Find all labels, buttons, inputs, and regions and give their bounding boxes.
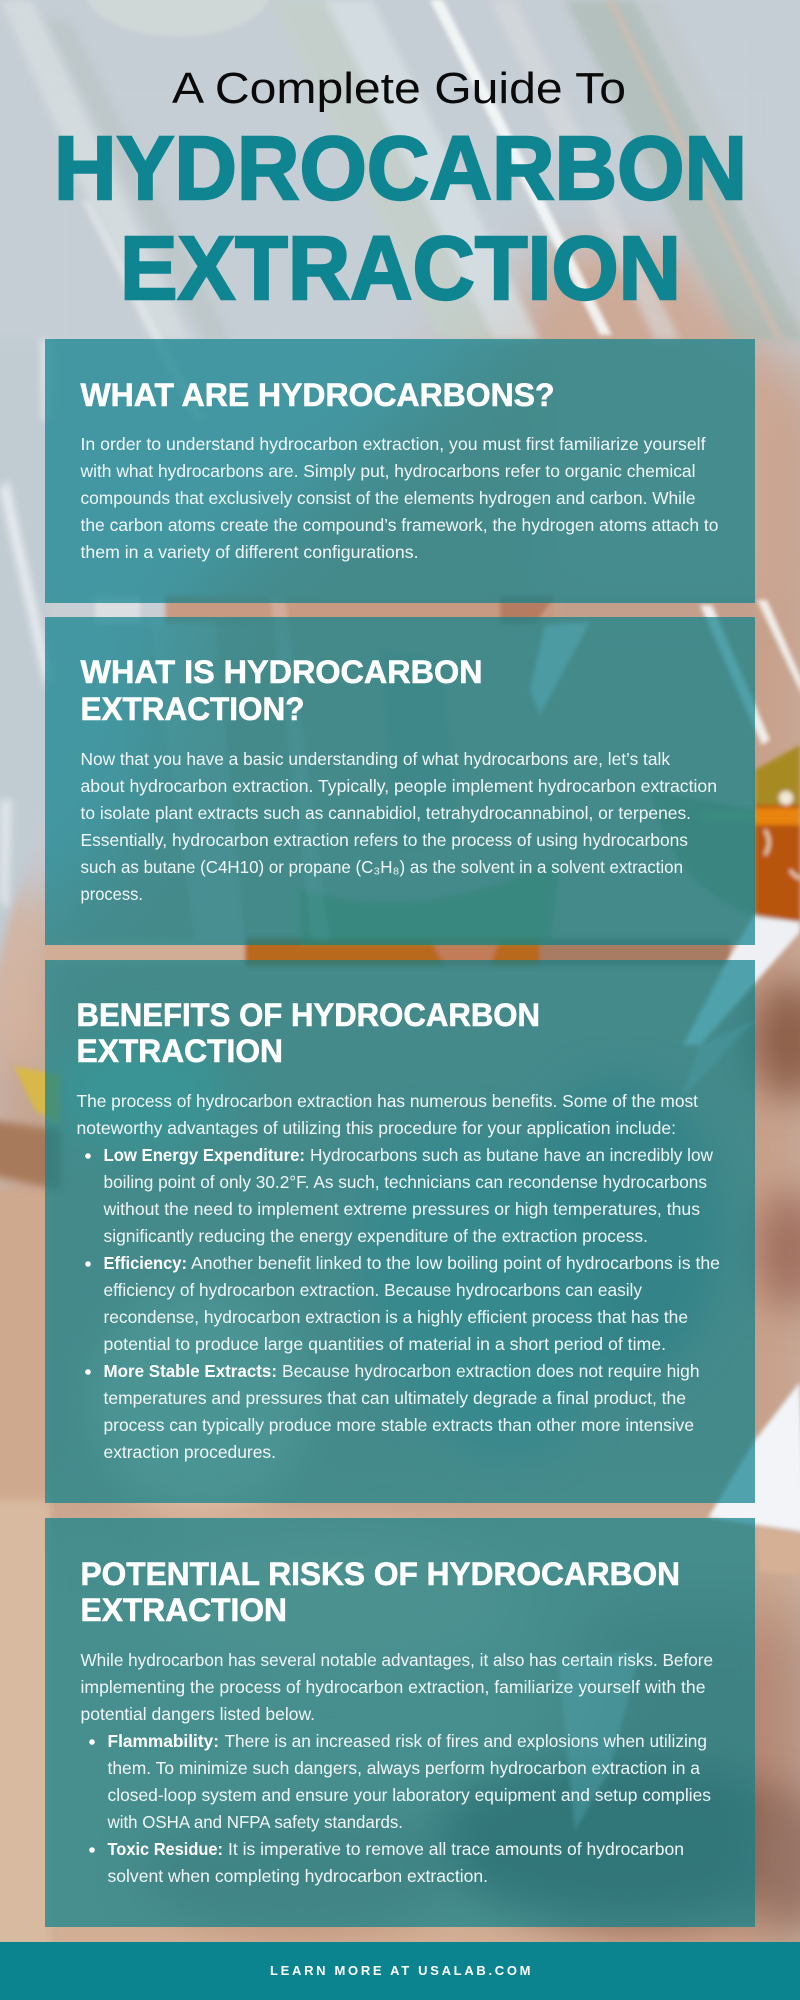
heading: what is hydrocarbon extraction: EXTRACTION? <box>80 691 304 727</box>
title <box>54 64 747 319</box>
text block: extraction explanation: process. <box>80 884 143 904</box>
liquid flask right <box>650 790 800 922</box>
text block: definition: the carbon atoms create the compound’s framework, the hydrogen atoms attach to <box>80 515 719 535</box>
bullet: efficiency: Efficiency: <box>104 1253 187 1273</box>
panel: what is hydrocarbon extraction <box>45 617 755 945</box>
text block: extraction explanation: such as butane (C4H10) or propane (C₃H₈) as the solvent in a solvent extraction <box>80 857 683 877</box>
skin and liquid seen between panels <box>165 596 555 624</box>
bullet: flammability: them. To minimize such dangers, always perform hydrocarbon extraction in a <box>108 1758 700 1778</box>
text block: definition: In order to understand hydrocarbon extraction, you must first familiarize yourself <box>80 434 706 454</box>
text block: definition <box>80 434 719 562</box>
text block: benefits intro: The process of hydrocarbon extraction has numerous benefits. Some of the most <box>76 1091 698 1111</box>
panel 4 box <box>45 1518 755 1927</box>
bullet: toxic residue: It is imperative to remove all trace amounts of hydrocarbon <box>228 1839 684 1859</box>
text block: extraction explanation: about hydrocarbon extraction. Typically, people implement hydrocarbon extraction <box>80 776 717 796</box>
bullet: low energy expenditure: boiling point of only 30.2°F. As such, technicians can recondense hydrocarbons <box>104 1172 707 1192</box>
bullet: efficiency <box>85 1253 720 1354</box>
white cuff lower right <box>708 1382 800 1532</box>
bullet: more stable extracts: More Stable Extracts: <box>104 1361 277 1381</box>
bullet: toxic residue: solvent when completing hydrocarbon extraction. <box>108 1866 488 1886</box>
text block: extraction explanation: Essentially, hydrocarbon extraction refers to the process of using hydrocarbons <box>80 830 688 850</box>
heading: what is hydrocarbon extraction <box>80 654 482 727</box>
bullet: toxic residue <box>89 1839 684 1886</box>
text block: risks intro: implementing the process of hydrocarbon extraction, familiarize yourself with the <box>80 1677 706 1697</box>
text block: definition: them in a variety of different configurations. <box>80 542 418 562</box>
text block: benefits intro <box>76 1091 698 1138</box>
text block: risks intro: While hydrocarbon has several notable advantages, it also has certain risks. Before <box>80 1650 713 1670</box>
heading: what is hydrocarbon extraction: WHAT IS HYDROCARBON <box>80 654 482 690</box>
bullet: flammability <box>89 1731 711 1832</box>
title line: Extraction: EXTRACTION <box>120 219 681 319</box>
bullet: low energy expenditure: without the need to implement extreme pressures or high temperatures, thus <box>103 1199 700 1219</box>
white glass band right <box>683 913 800 1045</box>
bullet: flammability: Flammability: <box>108 1731 219 1751</box>
footer bar <box>0 1942 800 2000</box>
text block: extraction explanation: Now that you have a basic understanding of what hydrocarbons are, let’s talk <box>80 749 670 769</box>
panel: potential risks of hydrocarbon extraction <box>45 1518 755 1927</box>
bullet: efficiency: Another benefit linked to the low boiling point of hydrocarbons is the <box>191 1253 720 1273</box>
panel: what are hydrocarbons <box>45 339 755 603</box>
bullet: more stable extracts: Because hydrocarbon extraction does not require high <box>282 1361 700 1381</box>
heading: potential risks: POTENTIAL RISKS OF HYDROCARBON <box>80 1556 680 1592</box>
bullet: flammability: There is an increased risk of fires and explosions when utilizing <box>224 1731 707 1751</box>
text block: definition: with what hydrocarbons are. Simply put, hydrocarbons refer to organic chemical <box>80 461 695 481</box>
heading: potential risks <box>80 1556 680 1628</box>
text block: extraction explanation: to isolate plant extracts such as cannabidiol, tetrahydrocannabinol, or terpenes. <box>80 803 691 823</box>
bullet: efficiency: efficiency of hydrocarbon extraction. Because hydrocarbons can easily <box>104 1280 642 1300</box>
bullet: low energy expenditure: Hydrocarbons such as butane have an incredibly low <box>310 1145 713 1165</box>
text block: benefits intro: noteworthy advantages of utilizing this procedure for your application include: <box>76 1118 676 1138</box>
panel 1 box <box>45 339 755 603</box>
title line: Hydrocarbon: HYDROCARBON <box>54 119 747 219</box>
pale glass streaks at top <box>0 0 190 340</box>
bullet: flammability: closed-loop system and ensure your laboratory equipment and setup complies <box>108 1785 711 1805</box>
heading: what are hydrocarbons: WHAT ARE HYDROCARBONS? <box>80 377 554 413</box>
left strip <box>0 340 45 1000</box>
bullet: efficiency: potential to produce large quantities of material in a short period of time. <box>104 1334 666 1354</box>
yellow liquid at left <box>14 1066 60 1125</box>
text block: definition: compounds that exclusively consist of the elements hydrogen and carbon. While <box>80 488 696 508</box>
bullet: more stable extracts <box>85 1361 699 1462</box>
panel 2 box <box>45 617 755 945</box>
bullet: flammability: with OSHA and NFPA safety standards. <box>107 1812 403 1832</box>
bullet: toxic residue: Toxic Residue: <box>108 1839 223 1859</box>
heading: potential risks: EXTRACTION <box>80 1592 287 1628</box>
footer text: LEARN MORE AT USALAB.COM <box>270 1963 530 1978</box>
heading: benefits <box>76 997 540 1069</box>
bullet: low energy expenditure <box>85 1145 713 1246</box>
heading: benefits: EXTRACTION <box>76 1033 283 1069</box>
text block: risks intro: potential dangers listed below. <box>80 1704 315 1724</box>
bullet: more stable extracts: process can typically produce more stable extracts than other more intensive <box>104 1415 694 1435</box>
bullet: low energy expenditure: Low Energy Expenditure: <box>104 1145 305 1165</box>
text block: risks intro <box>80 1650 713 1724</box>
bullet: more stable extracts: temperatures and pressures that can ultimately degrade a final product, the <box>104 1388 686 1408</box>
streaks inside panels <box>530 622 590 715</box>
heading: benefits: BENEFITS OF HYDROCARBON <box>76 997 540 1033</box>
text block: extraction explanation <box>80 749 717 904</box>
bullet: low energy expenditure: significantly reducing the energy expenditure of the extraction process. <box>104 1226 648 1246</box>
panel: benefits of hydrocarbon extraction <box>45 960 755 1503</box>
title line: A Complete Guide To: A Complete Guide To <box>172 64 626 113</box>
bullet: more stable extracts: extraction procedures. <box>104 1442 276 1462</box>
panel 3 box <box>45 960 755 1503</box>
bullet: efficiency: recondense, hydrocarbon extraction is a highly efficient process that has the <box>104 1307 688 1327</box>
